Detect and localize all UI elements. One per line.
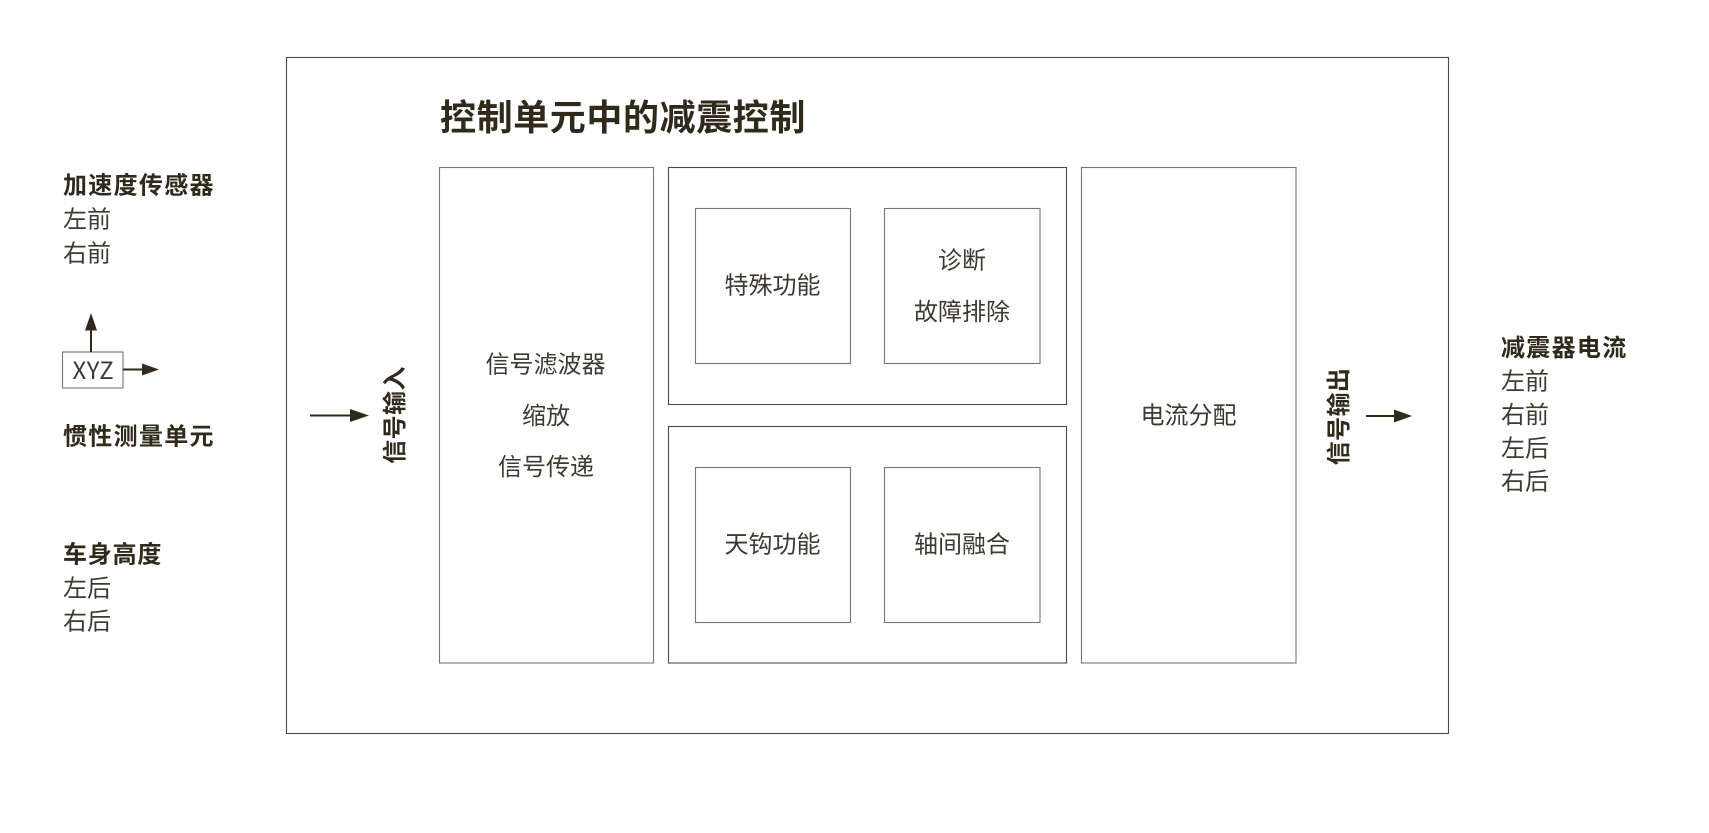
text: signal passing: 信号传递 — [498, 454, 594, 481]
box: axle blending — [884, 468, 1040, 622]
text block: damper current: 右前 — [1501, 402, 1549, 429]
title: 控制单元中的减震控制 — [440, 97, 806, 138]
text block: acceleration sensors: 加速度传感器 — [63, 172, 215, 200]
box: skyhook function — [696, 468, 850, 622]
label: inertial measurement unit: 惯性测量单元 — [63, 424, 215, 450]
arrow: right — [123, 364, 159, 376]
arrow: signal output — [1366, 410, 1412, 422]
text block: acceleration sensors: 右前 — [63, 240, 111, 268]
panel: lower function group — [668, 426, 1066, 663]
box: diagnostics and troubleshooting: 故障排除 — [914, 299, 1010, 326]
text block: damper current: 左前 — [1501, 368, 1549, 396]
text block: body height: 右后 — [63, 608, 111, 636]
arrow: up — [85, 313, 97, 352]
text block: damper current — [1501, 335, 1628, 496]
box: diagnostics and troubleshooting: 诊断 — [938, 248, 986, 274]
label: signal output: 信号输出 — [1326, 368, 1353, 465]
text: scaling: 缩放 — [522, 403, 570, 430]
box: diagnostics and troubleshooting — [884, 208, 1040, 364]
panel: current distribution column — [1082, 168, 1296, 663]
icon: XYZ inertial unit — [62, 313, 159, 388]
text block: damper current: 左后 — [1501, 436, 1549, 462]
panel: control unit outer frame — [286, 58, 1448, 734]
text block: body height — [63, 542, 162, 636]
text block: acceleration sensors: 左前 — [63, 206, 111, 234]
panel: signal processing column — [440, 168, 654, 663]
text block: acceleration sensors — [63, 172, 215, 268]
text block: damper current: 右后 — [1501, 468, 1549, 496]
panel: current distribution column: 电流分配 — [1140, 402, 1236, 430]
box: skyhook function: 天钩功能 — [724, 532, 820, 558]
label: signal input: 信号输入 — [382, 366, 409, 464]
icon: XYZ inertial unit: XYZ — [72, 351, 114, 386]
arrow: signal input — [310, 409, 369, 422]
text: signal filter: 信号滤波器 — [486, 352, 606, 378]
box: special functions: 特殊功能 — [724, 272, 820, 300]
text block: damper current: 减震器电流 — [1501, 335, 1628, 362]
text block: body height: 车身高度 — [63, 542, 162, 568]
box: axle blending: 轴间融合 — [914, 532, 1010, 558]
box: special functions — [696, 208, 850, 364]
panel: upper function group — [668, 168, 1066, 404]
text block: body height: 左后 — [63, 576, 111, 602]
